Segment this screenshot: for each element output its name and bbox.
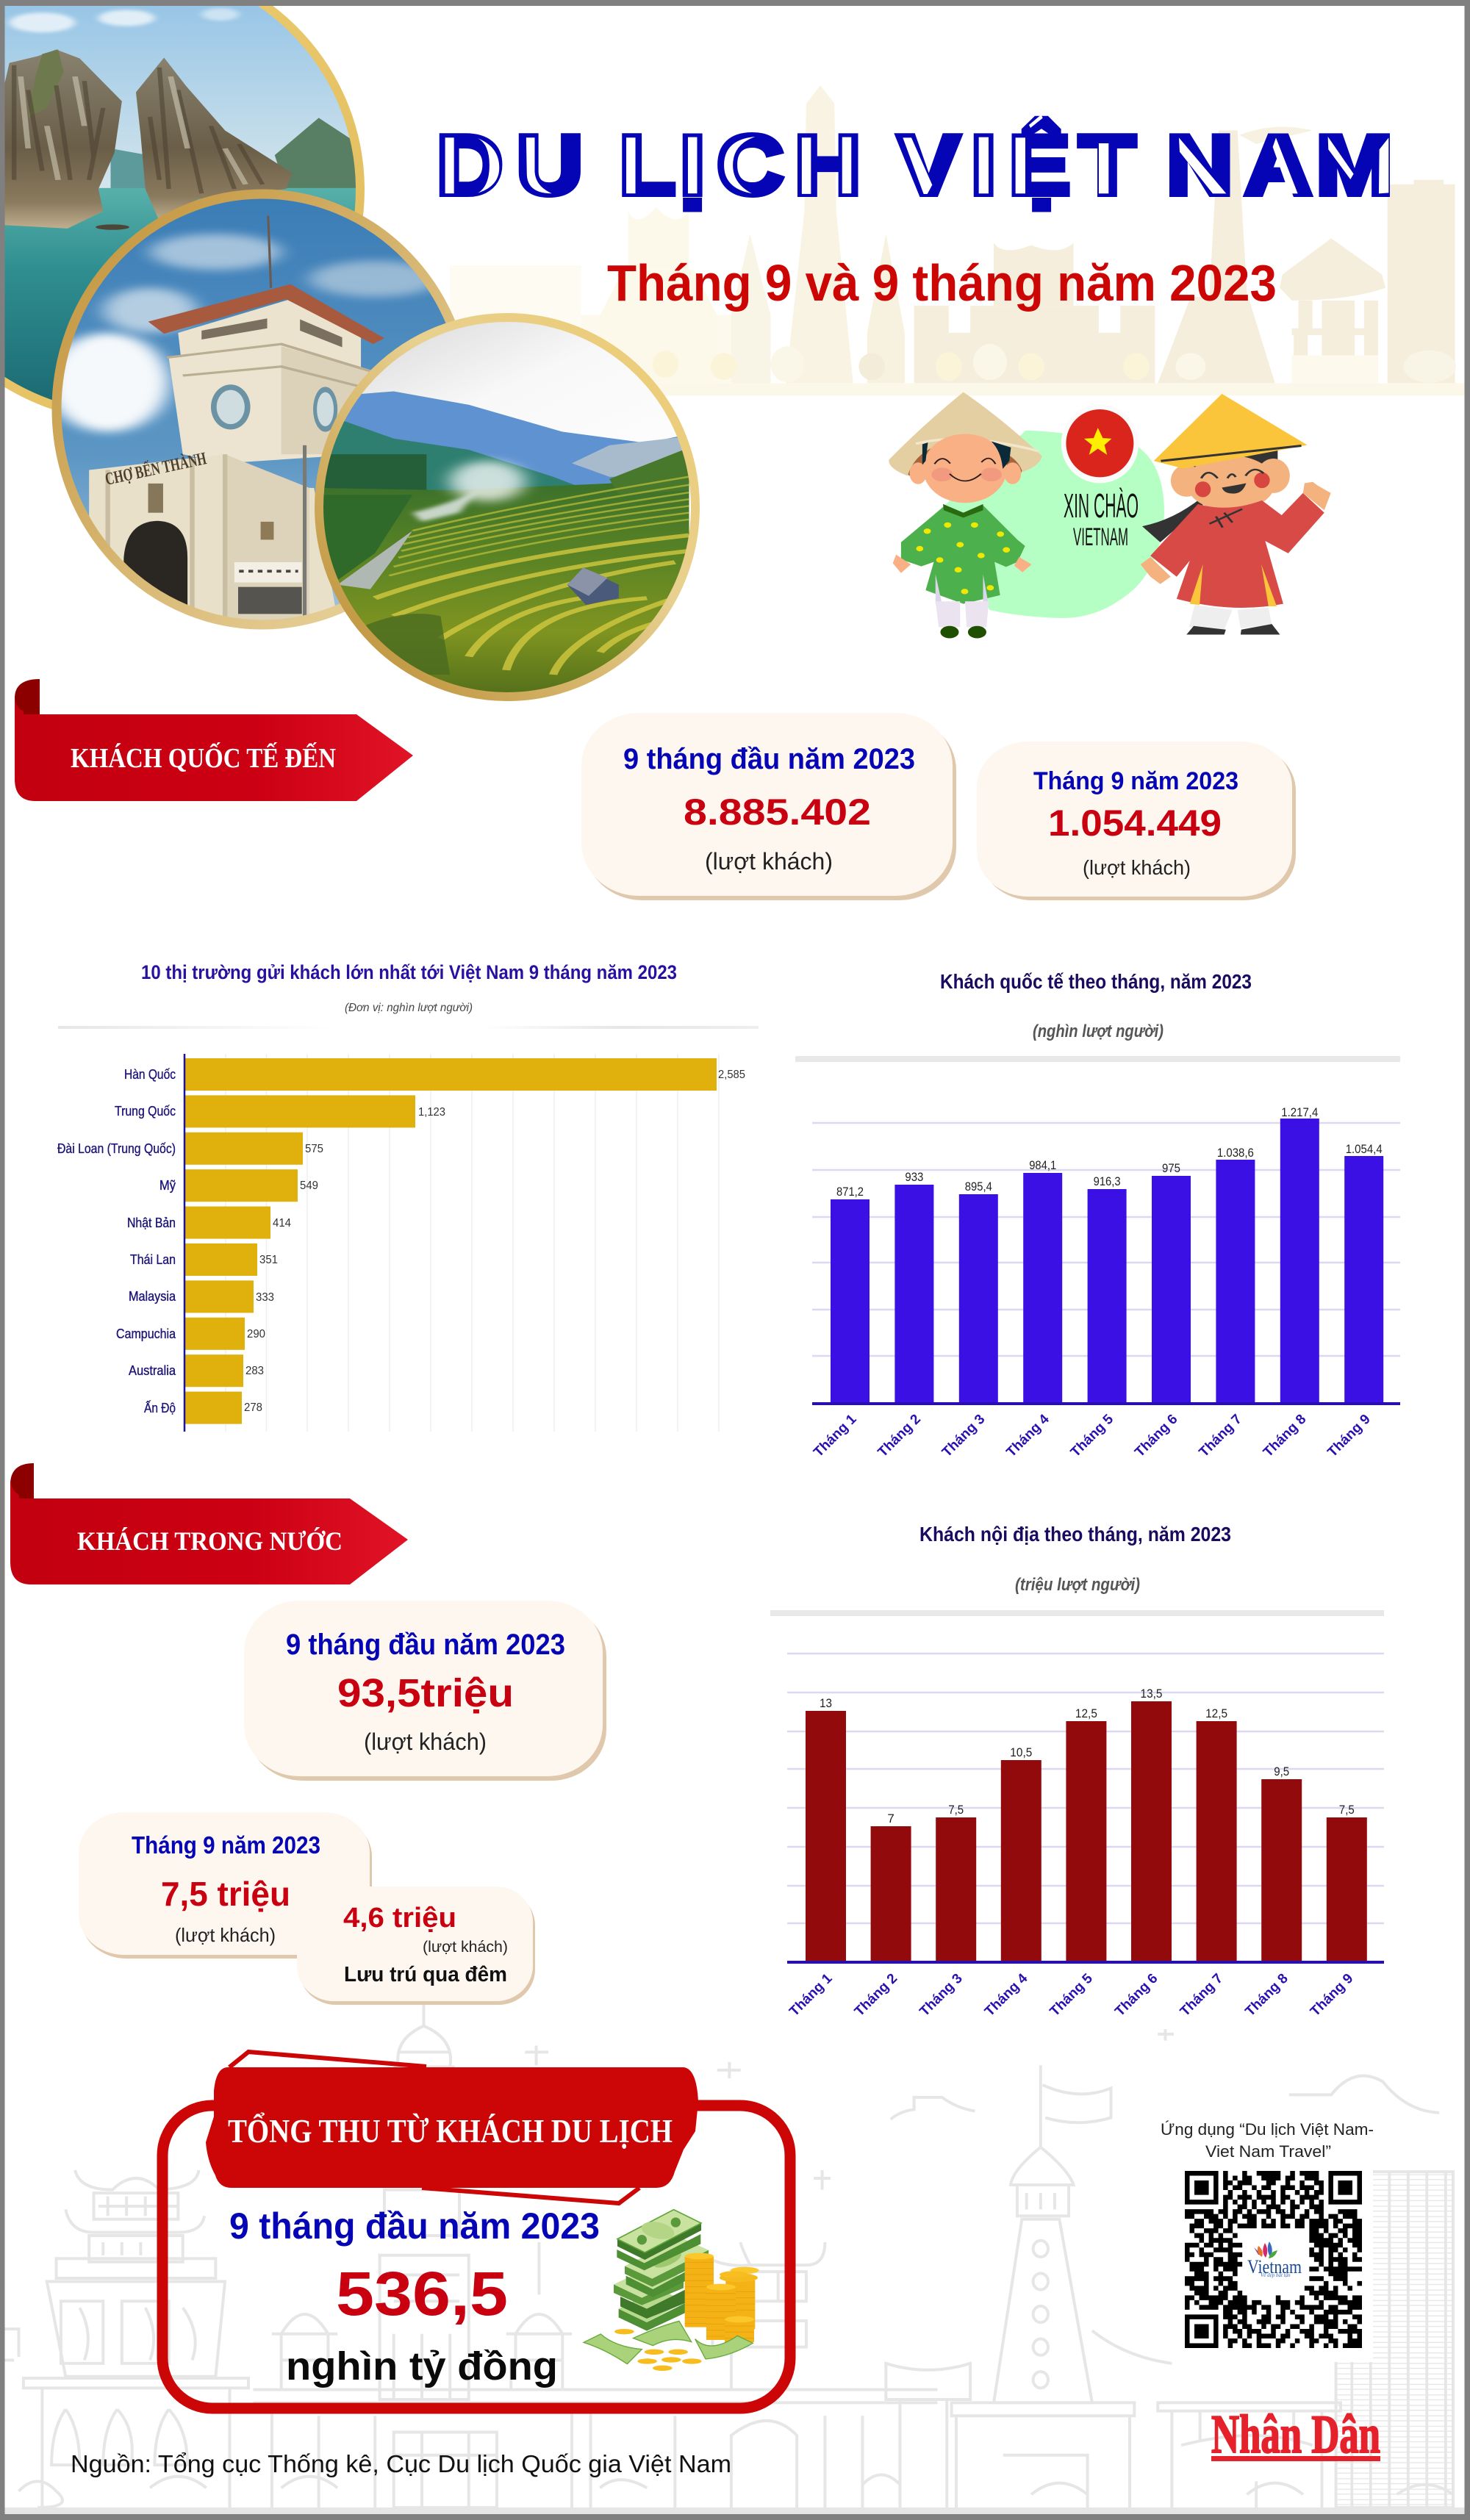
background: grey line-art city	[0, 1957, 1453, 2508]
month labels: Tháng 2	[852, 1971, 900, 2020]
value labels: 1.054,4	[1346, 1142, 1383, 1156]
card: Tháng 9 năm 2023 (domestic): 7,5 triệu	[161, 1875, 290, 1913]
month labels	[811, 1411, 1374, 1460]
value labels: 871,2	[836, 1185, 864, 1199]
category labels: Ấn Độ	[144, 1400, 176, 1415]
icon: Vietnam tourism logo: Vẻ đẹp bất tận	[1261, 2272, 1291, 2278]
month labels: Tháng 3	[917, 1971, 966, 2020]
illustration: children and flag greeting	[889, 392, 1331, 638]
value labels: 1.038,6	[1217, 1146, 1254, 1160]
panel: total tourism revenue	[162, 2052, 790, 2408]
chart heading: international visitors by month: Khách quốc tế theo tháng, năm 2023	[940, 970, 1252, 993]
text: Xin chào Vietnam	[1064, 487, 1139, 551]
value labels: 290	[247, 1328, 265, 1340]
month labels: Tháng 1	[786, 1970, 836, 2020]
panel: app QR code	[1161, 2117, 1374, 2362]
category labels: Campuchia	[116, 1327, 176, 1341]
value labels: 2,585	[718, 1069, 745, 1081]
card: overnight stays	[297, 1887, 535, 2005]
category labels: Nhật Bản	[127, 1216, 176, 1230]
card: 9 tháng đầu năm 2023 (international): 9 tháng đầu năm 2023	[623, 743, 915, 775]
icon: QR code	[1185, 2171, 1362, 2348]
banner: Khách quốc tế đến: KHÁCH QUỐC TẾ ĐẾN	[71, 742, 336, 774]
value labels: 414	[273, 1217, 291, 1230]
photo: Ha Long bay circle	[0, 0, 384, 417]
skyline: cream silhouette behind title	[450, 85, 1470, 396]
value labels: 549	[300, 1180, 318, 1192]
category labels: Đài Loan (Trung Quốc)	[57, 1141, 176, 1156]
value labels: 7,5	[1339, 1803, 1355, 1817]
icon: Vietnam tourism logo: Vietnam	[1247, 2256, 1302, 2277]
title: DU LỊCH VIỆT NAM: DU LỊCH VIỆT NAM	[437, 118, 1393, 212]
card: Tháng 9 năm 2023 (international): 1.054.449	[1048, 803, 1222, 844]
bar chart: domestic visitors by month	[786, 1654, 1384, 2020]
panel: total tourism revenue: nghìn tỷ đồng	[286, 2344, 558, 2388]
card: Tháng 9 năm 2023 (domestic): Tháng 9 năm 2023	[132, 1831, 320, 1859]
chart heading: international visitors by month	[795, 970, 1400, 1062]
value labels: 13,5	[1141, 1687, 1163, 1701]
month labels: Tháng 6	[1112, 1971, 1161, 2020]
card: 9 tháng đầu năm 2023 (international): (lượt khách)	[705, 848, 833, 875]
category labels	[57, 1067, 176, 1415]
chart heading: domestic visitors by month: Khách nội địa theo tháng, năm 2023	[919, 1523, 1231, 1546]
card: overnight stays: 4,6 triệu	[343, 1903, 456, 1934]
card: Tháng 9 năm 2023 (domestic)	[79, 1812, 372, 1959]
month labels: Tháng 8	[1261, 1412, 1309, 1460]
illustration: children and flag greeting: XIN CHÀO	[1064, 487, 1139, 525]
value labels: 1.217,4	[1281, 1105, 1318, 1119]
value labels: 9,5	[1274, 1765, 1289, 1778]
icon: Vietnam tourism logo	[1247, 2241, 1302, 2278]
value labels: 975	[1162, 1161, 1180, 1175]
value labels	[244, 1069, 745, 1414]
value labels: 933	[905, 1170, 923, 1184]
month labels: Tháng 7	[1177, 1971, 1226, 2020]
source note: Nguồn: Tổng cục Thống kê, Cục Du lịch Quốc gia Việt Nam	[71, 2450, 731, 2477]
label: ribbon	[206, 2067, 698, 2188]
chart heading: domestic visitors by month	[770, 1523, 1384, 1616]
card: 9 tháng đầu năm 2023 (international): 8.885.402	[684, 791, 871, 833]
text: Xin chào Vietnam: VIETNAM	[1073, 523, 1128, 551]
card: 9 tháng đầu năm 2023 (international)	[581, 713, 956, 900]
category labels: Hàn Quốc	[124, 1067, 176, 1082]
label: rotated ribbon frame	[229, 2052, 639, 2203]
card: Tháng 9 năm 2023 (domestic): (lượt khách)	[175, 1924, 276, 1946]
card: overnight stays: Lưu trú qua đêm	[344, 1963, 507, 1986]
category labels: Thái Lan	[130, 1252, 176, 1267]
category labels: Australia	[129, 1363, 176, 1378]
icon: Vietnam flag badge	[1061, 404, 1139, 483]
value labels: 984,1	[1029, 1158, 1056, 1172]
value labels: 12,5	[1205, 1706, 1227, 1720]
month labels: Tháng 9	[1308, 1971, 1356, 2020]
panel: total tourism revenue: 9 tháng đầu năm 2023	[229, 2205, 600, 2247]
chart heading: international visitors by month: (nghìn lượt người)	[1033, 1022, 1164, 1041]
value labels: 7,5	[948, 1803, 964, 1817]
banner: Khách trong nước	[10, 1463, 408, 1584]
card: 9 tháng đầu năm 2023 (domestic)	[244, 1601, 606, 1781]
panel: total tourism revenue: TỔNG THU TỪ KHÁCH DU LỊCH	[228, 2112, 673, 2150]
category labels: Trung Quốc	[115, 1104, 176, 1119]
text: market sign: CHỢ BẾN THÀNH	[104, 448, 208, 489]
value labels: 351	[259, 1254, 278, 1266]
banner: Khách quốc tế đến	[15, 679, 413, 801]
month labels: Tháng 4	[982, 1970, 1031, 2020]
value labels: 12,5	[1075, 1706, 1097, 1720]
logo: Nhân Dân: Nhân Dân	[1211, 2405, 1380, 2465]
card: Tháng 9 năm 2023 (international): Tháng 9 năm 2023	[1033, 767, 1238, 795]
value labels: 283	[245, 1365, 264, 1377]
chart heading: domestic visitors by month: (triệu lượt người)	[1015, 1575, 1140, 1595]
month labels: Tháng 9	[1324, 1412, 1374, 1460]
card: overnight stays: (lượt khách)	[423, 1939, 508, 1956]
month labels: Tháng 2	[875, 1412, 924, 1460]
category labels: Mỹ	[159, 1178, 176, 1193]
month labels: Tháng 7	[1197, 1412, 1245, 1460]
month labels: Tháng 6	[1132, 1412, 1181, 1460]
value labels: 1,123	[418, 1106, 445, 1119]
value labels: 895,4	[965, 1180, 992, 1193]
month labels: Tháng 5	[1068, 1411, 1116, 1460]
card: 9 tháng đầu năm 2023 (domestic): 93,5triệu	[337, 1671, 514, 1715]
green blob	[934, 431, 1164, 618]
background: base strip	[0, 2508, 1470, 2515]
month labels: Tháng 1	[811, 1411, 860, 1460]
panel: app QR code: Ứng dụng “Du lịch Việt Nam-	[1161, 2120, 1374, 2139]
boy in green ao dai	[889, 392, 1042, 638]
month labels: Tháng 5	[1047, 1970, 1096, 2020]
month labels: Tháng 8	[1242, 1971, 1291, 2020]
girl in red ao dai	[1141, 394, 1331, 634]
value labels	[836, 1105, 1383, 1199]
card: 9 tháng đầu năm 2023 (domestic): 9 tháng đầu năm 2023	[286, 1629, 565, 1661]
month labels: Tháng 3	[939, 1412, 988, 1460]
card: Tháng 9 năm 2023 (international): (lượt khách)	[1083, 856, 1191, 879]
chart heading: top 10 markets	[58, 961, 759, 1029]
panel: app QR code: Viet Nam Travel”	[1205, 2142, 1331, 2161]
value labels: 10,5	[1010, 1745, 1032, 1759]
value labels: 333	[256, 1291, 274, 1304]
value labels: 278	[244, 1401, 262, 1414]
category labels: Malaysia	[129, 1289, 176, 1304]
value labels: 13	[820, 1696, 832, 1710]
value labels: 916,3	[1094, 1174, 1121, 1188]
icon: money and coins	[584, 2210, 759, 2371]
photo: rice terraces circle	[314, 315, 708, 702]
chart heading: top 10 markets: (Đơn vị: nghìn lượt người)	[345, 1002, 473, 1014]
banner: Khách trong nước: KHÁCH TRONG NƯỚC	[77, 1526, 343, 1556]
card: 9 tháng đầu năm 2023 (domestic): (lượt khách)	[364, 1729, 487, 1755]
bar chart: international visitors by month	[811, 1105, 1400, 1460]
subtitle: Tháng 9 và 9 tháng năm 2023	[607, 254, 1277, 312]
photo: Ben Thanh market circle	[47, 189, 478, 630]
value labels: 575	[305, 1143, 323, 1155]
month labels	[786, 1970, 1356, 2020]
month labels: Tháng 4	[1003, 1411, 1053, 1460]
value labels	[820, 1687, 1355, 1826]
card: Tháng 9 năm 2023 (international)	[977, 742, 1296, 900]
panel: total tourism revenue: 536,5	[336, 2259, 508, 2328]
chart heading: top 10 markets: 10 thị trường gửi khách lớn nhất tới Việt Nam 9 tháng năm 2023	[141, 961, 677, 983]
value labels: 7	[887, 1812, 894, 1826]
bar chart: top 10 markets	[57, 1054, 745, 1432]
